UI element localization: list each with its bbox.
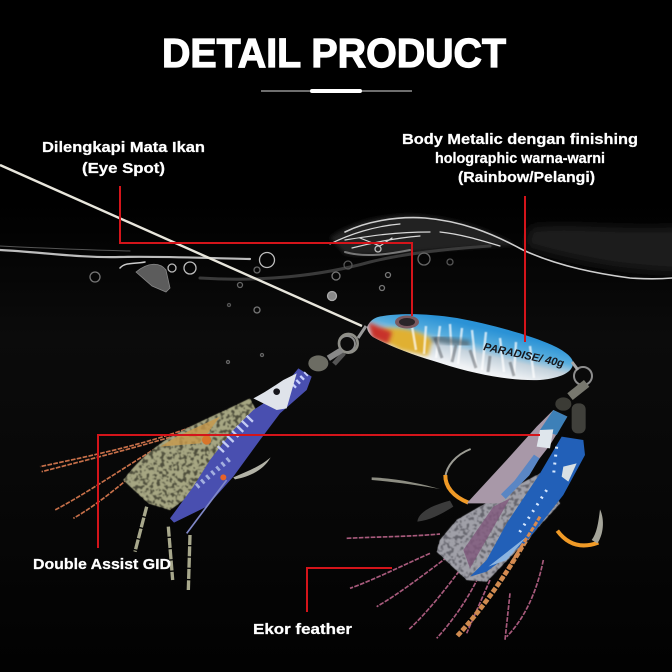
label: eye spot: (Eye Spot) xyxy=(82,160,165,177)
title: DETAIL PRODUCT xyxy=(162,30,506,76)
feather xyxy=(123,398,257,510)
dark blue tube xyxy=(470,437,585,577)
label: body metalic: holographic warna-warni xyxy=(435,150,605,167)
label: body metalic: (Rainbow/Pelangi) xyxy=(458,169,595,186)
splash under surface xyxy=(136,264,170,292)
label: body metalic: Body Metalic dengan finishing xyxy=(402,131,638,148)
label: feather: Ekor feather xyxy=(253,621,352,638)
fishing line xyxy=(0,165,362,326)
strands xyxy=(347,534,543,640)
connector: body xyxy=(524,196,526,342)
light tube xyxy=(467,410,567,503)
gray feather xyxy=(437,473,560,582)
bubbles xyxy=(90,246,453,364)
rear swivel xyxy=(334,326,592,385)
left assist hook xyxy=(40,334,358,590)
left hook xyxy=(445,449,471,477)
head xyxy=(253,373,297,410)
eye spot xyxy=(395,316,419,328)
lure body xyxy=(367,314,573,380)
connector: feather xyxy=(307,568,392,612)
connector: eye spot xyxy=(120,186,412,316)
hook tip xyxy=(233,457,271,479)
strands xyxy=(40,418,213,518)
title underline xyxy=(261,89,412,93)
right assist hooks xyxy=(347,383,603,640)
brand text: PARADISE/ 40g xyxy=(482,341,565,370)
lead xyxy=(417,501,453,522)
right hook xyxy=(557,531,598,545)
orange strand xyxy=(457,517,540,637)
water surface xyxy=(0,215,672,364)
label: double assist: Double Assist GID xyxy=(33,556,171,573)
swivels xyxy=(570,383,587,397)
blue tube xyxy=(170,368,312,523)
label: eye spot: Dilengkapi Mata Ikan xyxy=(42,139,205,156)
connector: double assist xyxy=(98,435,540,548)
